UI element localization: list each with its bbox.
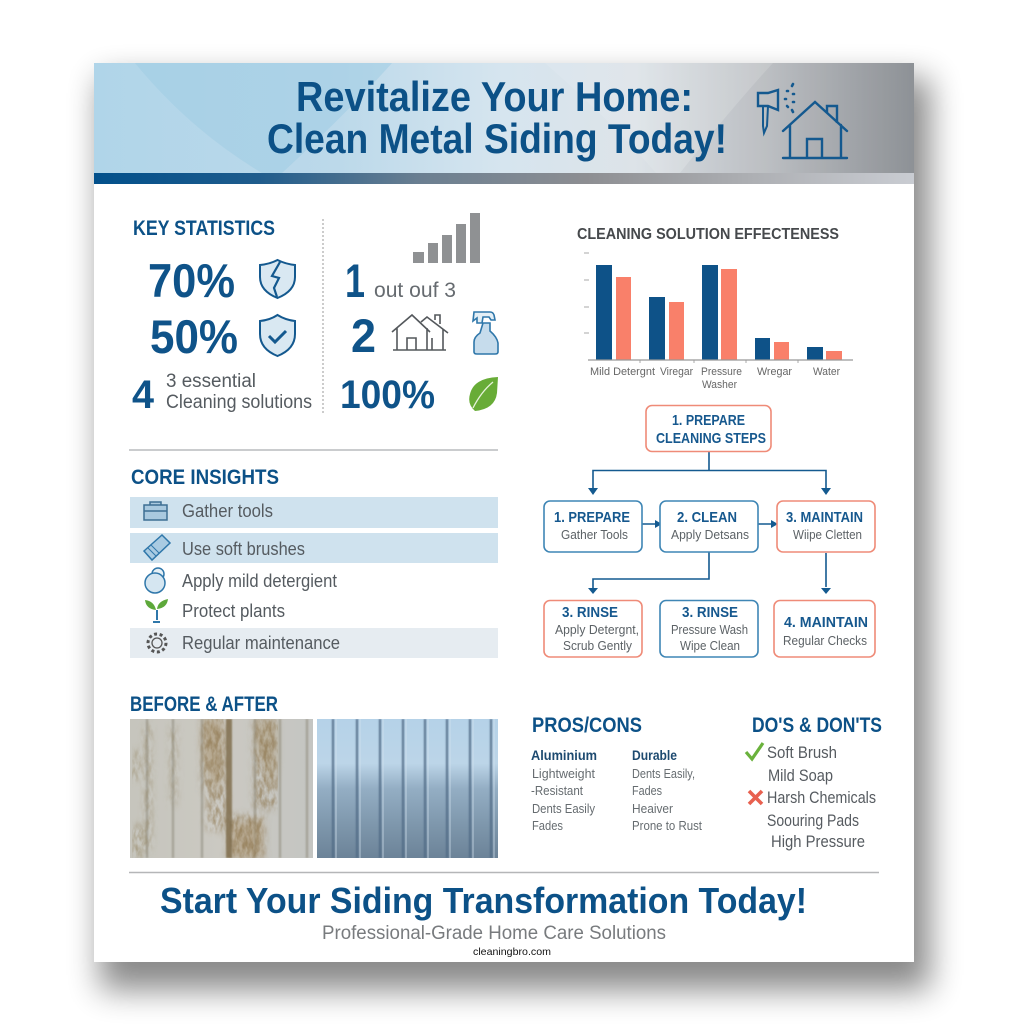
footer divider: [129, 872, 879, 874]
panel: pros and cons: [531, 714, 702, 833]
step: maintain: [777, 501, 875, 552]
step: prepare: Gather Tools: [561, 528, 628, 542]
step: maintain, checks: [774, 600, 875, 657]
column: aluminium: Fades: [532, 818, 563, 833]
don't items: High Pressure: [771, 833, 865, 851]
row: apply mild detergent: Apply mild detergient: [182, 571, 337, 591]
bar chart: cleaning solution effecteness: Viregar: [660, 366, 693, 378]
step: prepare: [544, 501, 642, 552]
panel: core insights: [130, 466, 498, 658]
step: rinse, wash: Wipe Clean: [680, 639, 740, 653]
footer url: cleaningbro.com: [473, 946, 551, 958]
do items: Mild Soap: [768, 767, 833, 785]
step: maintain: Wiipe Cletten: [793, 528, 862, 542]
step: rinse, scrub: Scrub Gently: [563, 639, 633, 653]
step: rinse, wash: [660, 600, 758, 657]
title: [267, 73, 727, 162]
step: rinse, wash: Pressure Wash: [671, 623, 748, 637]
stat: 1 out of 3: [345, 254, 456, 307]
footer subtitle: Professional-Grade Home Care Solutions: [322, 923, 666, 944]
column: durable: Dents Easily,: [632, 766, 695, 781]
stat: 4: 4: [132, 373, 155, 417]
heading: core insights: CORE INSIGHTS: [131, 466, 279, 489]
step: rinse, scrub: 3. RINSE: [562, 604, 618, 621]
icon: check: [746, 743, 763, 759]
icon: gray bars: [413, 213, 480, 263]
don't items: [767, 789, 876, 851]
row: use soft brushes: Use soft brushes: [182, 539, 305, 559]
stat: 1 out of 3: out ouf 3: [374, 279, 456, 302]
divider: [129, 449, 498, 451]
row: regular maintenance: [130, 628, 498, 658]
step: clean: Apply Detsans: [671, 528, 749, 542]
column: aluminium: -Resistant: [531, 783, 583, 798]
icon: broken shield: [260, 260, 295, 298]
stat: 100%: 100%: [340, 373, 435, 417]
row: regular maintenance: Regular maintenance: [182, 633, 340, 653]
column: durable: Fades: [632, 783, 662, 798]
do items: [767, 744, 837, 785]
page shadow: [100, 78, 930, 990]
chart title: CLEANING SOLUTION EFFECTENESS: [577, 226, 839, 243]
panel: do's and don'ts: [746, 714, 882, 851]
row: use soft brushes: [130, 533, 498, 563]
column: durable: Prone to Rust: [632, 818, 702, 833]
icon: houses: [392, 315, 448, 350]
bar chart: cleaning solution effecteness: Wregar: [757, 366, 792, 378]
stat: 50%: 50%: [150, 310, 238, 363]
row: gather tools: Gather tools: [182, 501, 273, 521]
step: maintain: 3. MAINTAIN: [786, 509, 863, 526]
icon: cross: [749, 791, 762, 804]
band under header: [94, 173, 914, 184]
bar chart: cleaning solution effecteness: Pressure: [701, 366, 742, 378]
heading: do's and don'ts: DO'S & DON'TS: [752, 714, 882, 737]
row: protect plants: [145, 599, 285, 622]
footer headline: Start Your Siding Transformation Today!: [160, 880, 807, 921]
heading: before and after: BEFORE & AFTER: [130, 693, 278, 716]
dotted divider: [322, 219, 324, 415]
stat text: 3 essential cleaning solutions: [166, 371, 312, 413]
step: maintain, checks: 4. MAINTAIN: [784, 614, 868, 631]
row: gather tools: [130, 497, 498, 528]
step: prepare: 1. PREPARE: [554, 509, 630, 526]
icon: leaf: [469, 377, 498, 411]
column: aluminium: Lightweight: [532, 766, 595, 781]
photo: after, clean siding: [317, 719, 498, 858]
column: aluminium: Aluminium: [531, 747, 597, 763]
stat: 1 out of 3: 1: [345, 254, 365, 307]
header banner: [94, 63, 914, 184]
icon: pressure washer and house: [758, 84, 847, 158]
step: top box: CLEANING STEPS: [656, 430, 766, 447]
step: rinse, wash: 3. RINSE: [682, 604, 738, 621]
row: apply mild detergent: [145, 568, 337, 593]
heading: pros/cons: PROS/CONS: [532, 714, 642, 737]
stat: 2: 2: [351, 309, 376, 362]
title: Clean Metal Siding Today!: [267, 115, 727, 162]
column: durable: Durable: [632, 747, 677, 763]
stat text: 3 essential cleaning solutions: Cleaning solutions: [166, 392, 312, 413]
icon: spray bottle: [473, 312, 498, 354]
photo: before, stained siding: [130, 719, 313, 858]
step: maintain, checks: Regular Checks: [783, 634, 867, 648]
bar chart: cleaning solution effecteness: [577, 226, 853, 391]
row: protect plants: Protect plants: [182, 601, 285, 621]
bar chart: cleaning solution effecteness: Washer: [702, 379, 737, 391]
don't items: Soouring Pads: [767, 812, 859, 830]
column: aluminium: [531, 747, 597, 833]
flowchart: cleaning steps: [544, 406, 875, 657]
title: Revitalize Your Home:: [296, 73, 693, 120]
step: top box: 1. PREPARE: [672, 412, 745, 429]
don't items: Harsh Chemicals: [767, 789, 876, 807]
column: durable: Heaiver: [632, 801, 674, 816]
icon: check shield: [260, 315, 295, 356]
step: clean: [660, 501, 758, 552]
arrows: [588, 452, 831, 594]
step: rinse, scrub: Apply Detergnt,: [555, 623, 639, 637]
bar chart: cleaning solution effecteness: Water: [813, 366, 840, 378]
step: rinse, scrub: [544, 600, 642, 657]
do items: Soft Brush: [767, 744, 837, 762]
heading: key statistics: KEY STATISTICS: [133, 217, 275, 240]
stat: 70%: 70%: [148, 254, 235, 307]
column: durable: [632, 747, 702, 833]
bar chart: cleaning solution effecteness: Mild Detergnt: [590, 366, 655, 378]
page panel: [94, 63, 914, 962]
step: clean: 2. CLEAN: [677, 509, 737, 526]
stat text: 3 essential cleaning solutions: 3 essential: [166, 371, 256, 392]
column: aluminium: Dents Easily: [532, 801, 595, 816]
step: top box: [646, 406, 771, 452]
